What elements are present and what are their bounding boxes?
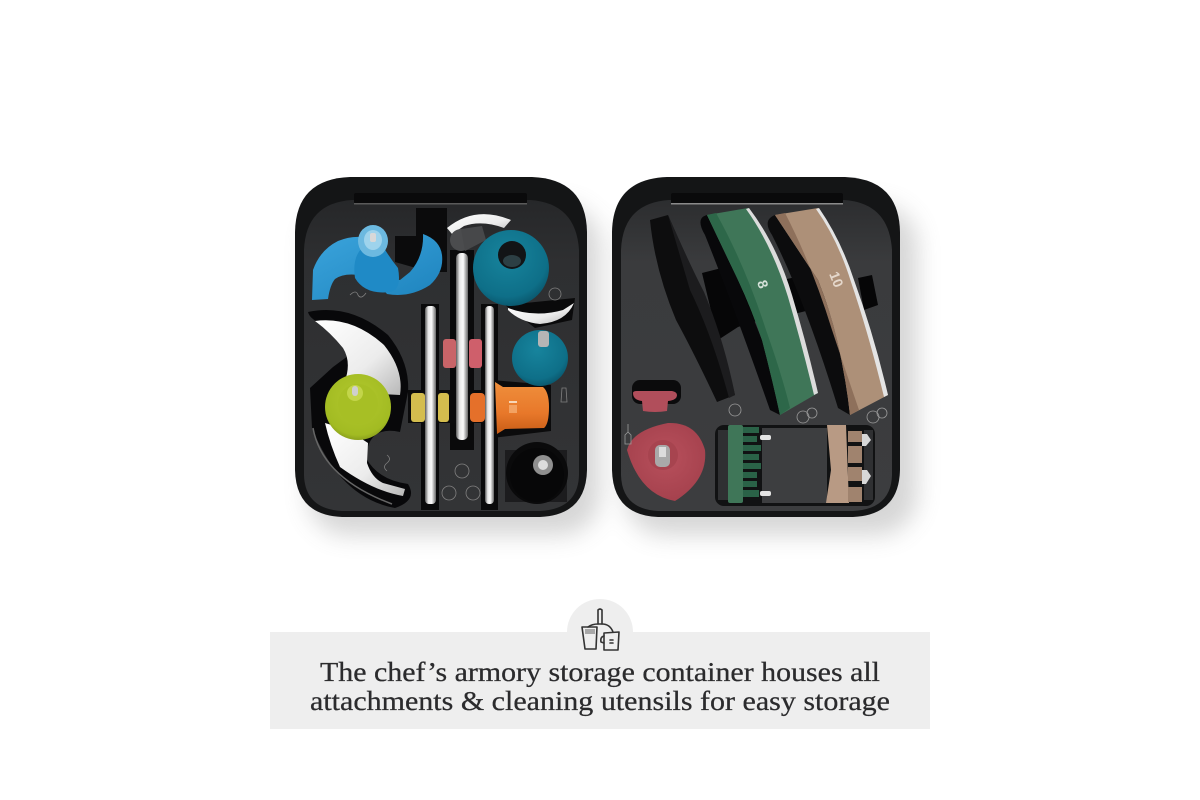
caption banner bbox=[270, 632, 930, 729]
green comb attachment bbox=[728, 425, 771, 503]
disc: black grating disc bbox=[650, 215, 760, 402]
case floor bbox=[304, 200, 579, 511]
tray position marks bbox=[350, 288, 567, 500]
caption icon badge bbox=[567, 599, 633, 665]
blade: blue dough tool bbox=[312, 225, 442, 300]
lid hinge bar bbox=[671, 193, 843, 204]
disc: tan disc hub stubs bbox=[782, 272, 878, 315]
hub: black attachment bbox=[510, 448, 564, 502]
small red plug bbox=[632, 380, 681, 412]
comb tray bbox=[715, 425, 875, 506]
disc: tan 10 mm slicer: 10 bbox=[826, 269, 847, 290]
panel: left storage case bbox=[295, 177, 587, 517]
case shell bbox=[612, 177, 900, 517]
hub: pink spacers bbox=[443, 339, 482, 368]
case shell bbox=[295, 177, 587, 517]
caption text bbox=[310, 657, 890, 716]
panel: right storage case bbox=[612, 177, 900, 517]
hub: small teal attachment bbox=[512, 330, 568, 386]
blade: large chrome S-blade with lime hub bbox=[313, 320, 405, 504]
tray position marks bbox=[625, 404, 887, 444]
hub: yellow spacers bbox=[411, 393, 449, 422]
disc: green 8 mm slicer: 8 bbox=[754, 278, 772, 291]
slicing disc: centre bbox=[456, 253, 468, 440]
disc: green 8 mm slicer bbox=[700, 208, 818, 415]
case shadows bbox=[308, 205, 917, 535]
blade: upper chrome blade with teal hub bbox=[447, 214, 574, 324]
slicing disc: right bbox=[485, 306, 494, 504]
lid hinge bar bbox=[354, 193, 527, 204]
disc: tan 10 mm slicer bbox=[768, 208, 888, 415]
caption text: attachments & cleaning utensils for easy storage bbox=[310, 686, 890, 716]
slicing disc: left bbox=[425, 306, 436, 504]
tan comb attachment bbox=[826, 425, 871, 503]
red pusher attachment bbox=[627, 423, 705, 501]
case floor bbox=[621, 200, 892, 511]
hub: orange attachment bbox=[470, 382, 549, 434]
caption text: The chef’s armory storage container houses all bbox=[320, 657, 880, 687]
recess pockets bbox=[395, 208, 447, 272]
icon: storage container with cleaning utensils bbox=[582, 609, 619, 650]
